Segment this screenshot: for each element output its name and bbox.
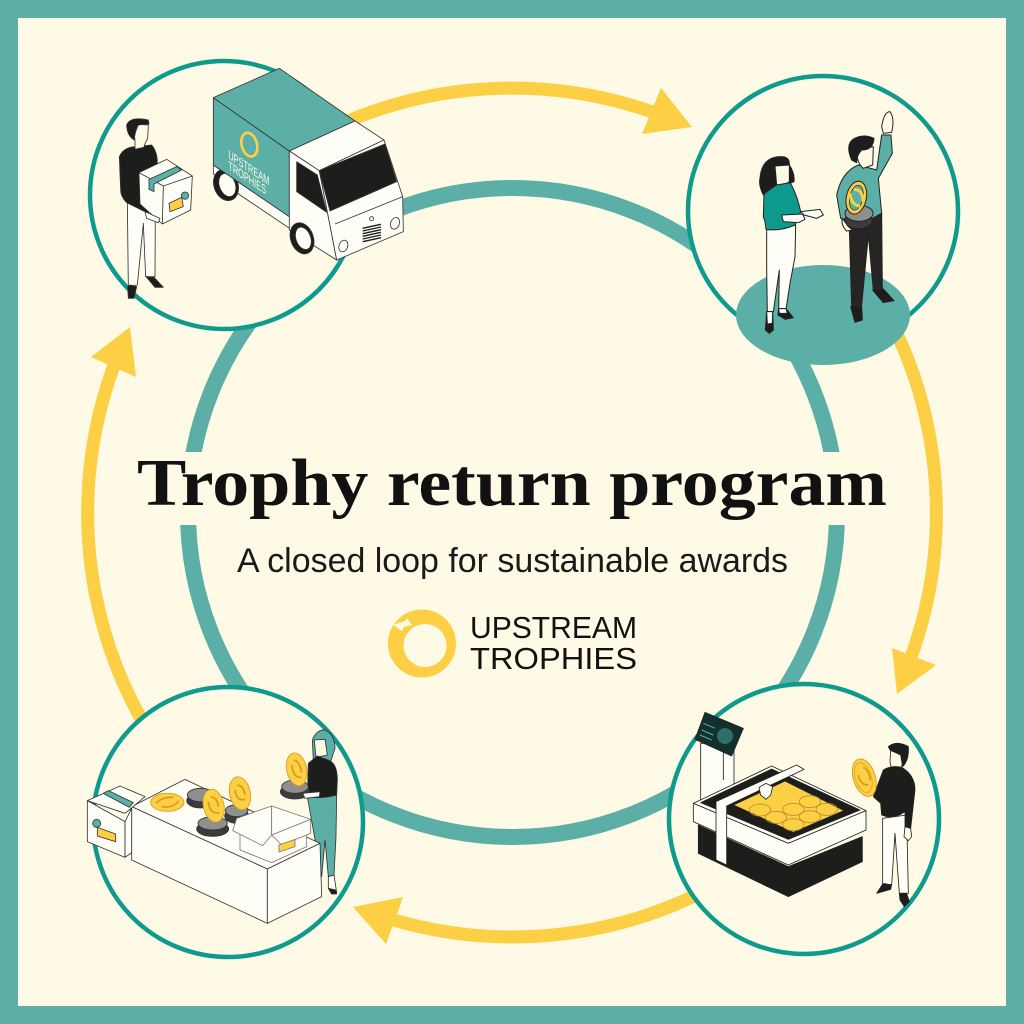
icon: woman gesturing xyxy=(760,157,823,333)
icon: cutting machine xyxy=(693,712,866,897)
icon: shipping box xyxy=(87,786,145,857)
icon: man inspecting trophy xyxy=(848,743,915,907)
arrow: remanufacture to packing xyxy=(353,887,712,944)
arrow: ceremony to remanufacture xyxy=(885,310,936,694)
arrow: delivery to ceremony xyxy=(340,88,692,134)
logo: Upstream Trophies: TROPHIES xyxy=(470,641,637,676)
logo: Upstream Trophies: UPSTREAM xyxy=(470,610,637,645)
icon: truck: TROPHIES xyxy=(228,159,266,198)
arrow: packing to delivery xyxy=(88,327,142,720)
panel: delivery truck and courier xyxy=(90,61,403,329)
subtitle: A closed loop for sustainable awards xyxy=(237,542,788,580)
panel: packing trophies for return xyxy=(87,687,363,957)
logo: Upstream Trophies xyxy=(388,610,637,677)
icon: trophies on table xyxy=(151,775,254,836)
icon: man raising trophy xyxy=(837,112,894,322)
panel: award ceremony with teal platform xyxy=(688,76,958,365)
icon: truck: UPSTREAM xyxy=(228,148,269,189)
title: Trophy return program xyxy=(137,446,887,520)
icon: packing table xyxy=(132,779,322,923)
icon: courier carrying box xyxy=(119,119,192,298)
inner teal loop ring xyxy=(188,188,837,837)
icon: open cardboard box xyxy=(233,806,311,863)
icon: woman with trophy xyxy=(280,730,337,894)
panel: laser cutting machine xyxy=(669,684,939,954)
icon: truck xyxy=(209,68,403,260)
